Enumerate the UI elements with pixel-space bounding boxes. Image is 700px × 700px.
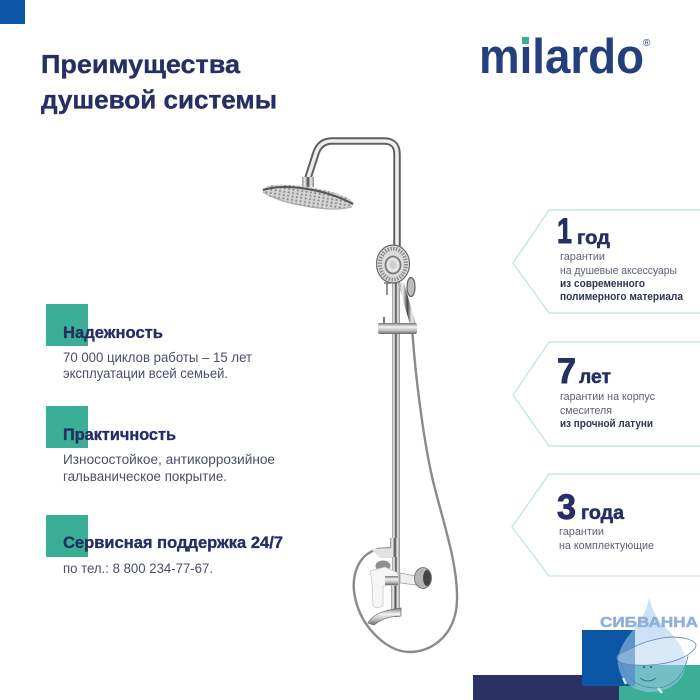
T holder xyxy=(384,283,391,295)
feature: reliability: 70 000 циклов работы – 15 лет xyxy=(63,350,252,365)
logo: milardo: ® xyxy=(643,38,651,49)
warranty card: 1 year xyxy=(513,210,700,313)
warranty card: 3 years: года xyxy=(581,503,624,524)
warranty card: 7 years: 7 xyxy=(557,352,576,391)
feature: practicality: Износостойкое, антикоррозийное xyxy=(63,452,275,467)
title xyxy=(41,49,277,114)
warranty card: 3 years: на комплектующие xyxy=(559,540,654,552)
slider xyxy=(378,317,417,334)
hose xyxy=(354,328,457,652)
warranty card: 7 years: смесителя xyxy=(560,405,612,417)
feature: practicality xyxy=(46,406,275,484)
warranty card: 7 years: гарантии на корпус xyxy=(560,391,656,403)
warranty card: 7 years: лет xyxy=(579,367,611,388)
title: Преимущества xyxy=(41,49,241,79)
warranty card: 1 year: полимерного материала xyxy=(560,291,684,303)
hand shower xyxy=(376,245,417,328)
corner blue square xyxy=(0,0,25,24)
feature: reliability: эксплуатации всей семьей. xyxy=(63,366,228,381)
feature: reliability xyxy=(46,304,252,381)
vertical rod xyxy=(392,260,400,617)
logo: milardo: milardo xyxy=(479,30,644,84)
watermark: Сибванна: СИБВАННА xyxy=(600,615,699,631)
feature: practicality: Практичность xyxy=(63,426,176,444)
shower head xyxy=(261,177,355,214)
warranty card: 3 years: гарантии xyxy=(559,526,604,538)
feature: reliability: Надежность xyxy=(63,324,163,342)
warranty card: 7 years: из прочной латуни xyxy=(560,418,653,430)
watermark: Сибванна xyxy=(600,597,699,693)
overhead arm xyxy=(306,141,397,260)
warranty card: 7 years xyxy=(513,342,700,446)
warranty card: 1 year: на душевые аксессуары xyxy=(560,265,677,277)
warranty card: 3 years xyxy=(512,474,700,576)
title: душевой системы xyxy=(41,84,277,114)
warranty card: 1 year: год xyxy=(577,228,610,249)
feature: support xyxy=(46,515,283,576)
warranty card: 1 year: 1 xyxy=(557,212,572,251)
bottom decorative blocks xyxy=(473,630,700,700)
warranty card: 1 year: гарантии xyxy=(560,251,605,263)
feature: support: Сервисная поддержка 24/7 xyxy=(63,534,283,552)
shower system illustration xyxy=(261,141,457,652)
mixer xyxy=(368,538,432,625)
warranty card: 1 year: из современного xyxy=(560,278,645,290)
feature: practicality: гальваническое покрытие. xyxy=(63,469,227,484)
warranty card: 3 years: 3 xyxy=(557,488,576,527)
feature: support: по тел.: 8 800 234-77-67. xyxy=(63,561,213,576)
